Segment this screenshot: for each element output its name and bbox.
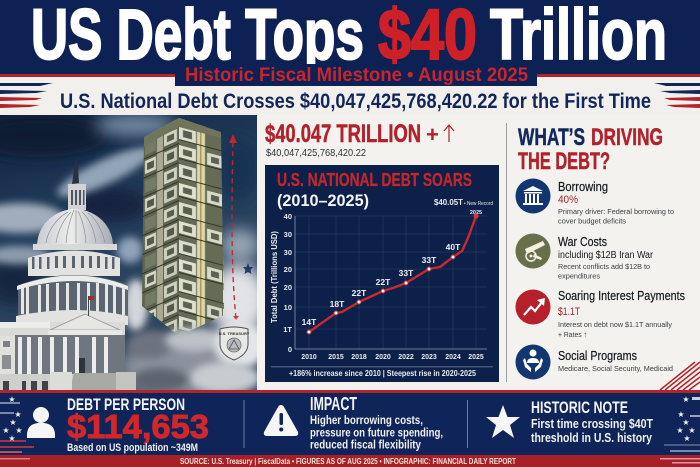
driver: borrowing bbox=[516, 178, 674, 226]
big debt figure: + bbox=[426, 122, 439, 147]
decorative stripes: right bbox=[654, 83, 700, 108]
y-axis labels: 0 bbox=[288, 345, 292, 354]
photo panel: Capitol and money stack bbox=[0, 113, 268, 398]
driver: social programs: Social Programs bbox=[558, 348, 637, 363]
point labels: 14T bbox=[302, 317, 317, 327]
stat: debt per person bbox=[27, 395, 209, 454]
big debt figure: $40,047,425,768,420.22 bbox=[266, 147, 366, 159]
stat: impact: IMPACT bbox=[310, 394, 357, 414]
stat: historic note: threshold in U.S. history bbox=[531, 430, 653, 445]
drivers heading: WHAT’S bbox=[518, 124, 585, 151]
driver: interest payments: $1.1T bbox=[558, 306, 580, 318]
y-axis labels: 30 bbox=[284, 248, 292, 257]
y-axis labels: 10 bbox=[284, 303, 292, 312]
x-axis labels: 2010 bbox=[301, 354, 317, 361]
footer stars right: ★ bbox=[682, 395, 690, 404]
driver: borrowing: Borrowing bbox=[558, 179, 608, 194]
driver: borrowing: cover budget deficits bbox=[558, 216, 626, 226]
driver: social programs: Medicare, Social Security, Medicaid bbox=[558, 364, 673, 373]
record callout: • New Record bbox=[464, 201, 493, 207]
footer stars left: ★ bbox=[15, 426, 23, 435]
driver: borrowing: 40% bbox=[558, 194, 578, 206]
x-axis labels: 2015 bbox=[328, 354, 344, 361]
stat: historic note bbox=[486, 398, 653, 445]
big debt figure: $40.047 TRILLION bbox=[265, 120, 421, 148]
US Capitol building bbox=[0, 158, 136, 390]
footer stars right: ★ bbox=[683, 434, 691, 443]
footer stars right: ★ bbox=[676, 426, 684, 435]
foreground clouds bbox=[120, 321, 266, 398]
footer stars left: ★ bbox=[8, 395, 16, 404]
point labels: 18T bbox=[330, 299, 345, 309]
footer stripes right bbox=[660, 397, 700, 464]
driver: war costs bbox=[516, 234, 654, 280]
driver: interest payments: Interest on debt now $1.1T annually bbox=[558, 320, 672, 329]
footer stars left: ★ bbox=[8, 434, 16, 443]
header band bbox=[0, 0, 700, 115]
x-axis labels: 2023 bbox=[421, 354, 437, 361]
U.S. Treasury shield: U.S. TREASURY bbox=[219, 331, 250, 336]
footer stars left bbox=[2, 395, 23, 443]
record callout: 2025 bbox=[470, 210, 482, 216]
panel: drivers bbox=[506, 123, 685, 382]
red dashed rise arrow bbox=[229, 134, 239, 320]
money stack tower bbox=[142, 118, 224, 336]
stat: debt per person: Based on US population ~349M bbox=[67, 442, 198, 454]
point labels: 33T bbox=[399, 268, 414, 278]
driver: war costs: including $12B Iran War bbox=[558, 250, 654, 261]
record callout: $40.05T bbox=[434, 198, 463, 207]
clouds behind tower bbox=[124, 264, 268, 336]
decorative corner hatch bbox=[660, 362, 700, 390]
stat: impact: reduced fiscal flexibility bbox=[310, 438, 421, 452]
stat: impact: Higher borrowing costs, bbox=[310, 413, 423, 427]
x-axis labels: 2022 bbox=[398, 354, 414, 361]
x-axis labels: 2020 bbox=[375, 354, 391, 361]
point labels: 22T bbox=[376, 277, 391, 287]
debt line series bbox=[307, 213, 479, 334]
driver: war costs: expenditures bbox=[558, 272, 600, 280]
icon: star bbox=[486, 405, 520, 438]
x-axis labels: 2024 bbox=[445, 354, 461, 361]
footer stars left: ★ bbox=[9, 418, 17, 427]
icon: warning triangle bbox=[264, 405, 298, 436]
record callout bbox=[434, 198, 493, 216]
source footer: SOURCE: U.S. Treasury | FiscalData • FIGURES AS OF AUG 2025 • INFOGRAPHIC: FINANCIAL DAILY REPORT bbox=[180, 457, 516, 466]
footer stars right: ★ bbox=[677, 410, 685, 419]
y-axis labels: 30 bbox=[284, 230, 292, 239]
y-axis title: Total Debt (Trillions USD) bbox=[270, 231, 279, 323]
chart title: U.S. NATIONAL DEBT SOARS bbox=[277, 170, 472, 190]
footer stars right: ★ bbox=[688, 426, 696, 435]
decorative stripes: left bbox=[0, 83, 53, 108]
stat: historic note: HISTORIC NOTE bbox=[531, 398, 628, 417]
y-axis labels: 40 bbox=[284, 212, 292, 221]
line chart panel bbox=[265, 165, 499, 382]
stat: historic note: First time crossing $40T bbox=[531, 416, 653, 431]
subtitle banner: Historic Fiscal Milestone • August 2025 bbox=[185, 64, 528, 86]
footer stripes left bbox=[0, 402, 34, 460]
chart caption: +186% increase since 2010 | Steepest rise in 2020-2025 bbox=[289, 369, 476, 378]
stat: impact: pressure on future spending, bbox=[310, 426, 443, 440]
icon: person bbox=[27, 407, 55, 438]
x-axis labels bbox=[301, 354, 484, 361]
footer stars left: ★ bbox=[14, 410, 22, 419]
driver: war costs: Recent conflicts add $12B to bbox=[558, 262, 650, 271]
point labels: 22T bbox=[352, 288, 367, 298]
x-axis labels: 2018 bbox=[351, 354, 367, 361]
stat: impact bbox=[264, 394, 443, 452]
chart title bbox=[277, 170, 472, 210]
y-axis labels bbox=[283, 212, 292, 354]
small star bbox=[243, 263, 253, 274]
x-axis labels: 2025 bbox=[468, 354, 484, 361]
y-axis labels: 20 bbox=[284, 265, 292, 274]
footer stars left: ★ bbox=[2, 426, 10, 435]
drivers heading bbox=[518, 124, 663, 175]
driver: interest payments bbox=[516, 288, 685, 339]
drivers heading: THE DEBT? bbox=[518, 148, 610, 175]
y-axis labels: 1T bbox=[283, 325, 292, 334]
driver: borrowing: Primary driver: Federal borrowing to bbox=[558, 207, 674, 216]
chart title: (2010–2025) bbox=[277, 191, 369, 210]
y-axis labels: 20 bbox=[284, 283, 292, 292]
point labels bbox=[302, 242, 461, 327]
stormy sky bbox=[0, 113, 260, 390]
stat: debt per person: DEBT PER PERSON bbox=[67, 395, 185, 414]
footer stars right bbox=[676, 395, 696, 443]
stat: debt per person: $114,653 bbox=[67, 408, 209, 445]
drivers heading: DRIVING bbox=[591, 124, 663, 151]
driver: social programs bbox=[516, 344, 673, 380]
footer stars right: ★ bbox=[682, 418, 690, 427]
driver: interest payments: + Rates ↑ bbox=[558, 330, 587, 339]
point labels: 33T bbox=[422, 255, 437, 265]
point labels: 40T bbox=[446, 242, 461, 252]
bottom band bbox=[0, 390, 700, 467]
driver: war costs: War Costs bbox=[558, 234, 607, 249]
big debt figure bbox=[265, 120, 454, 159]
U.S. Treasury shield bbox=[219, 327, 250, 360]
